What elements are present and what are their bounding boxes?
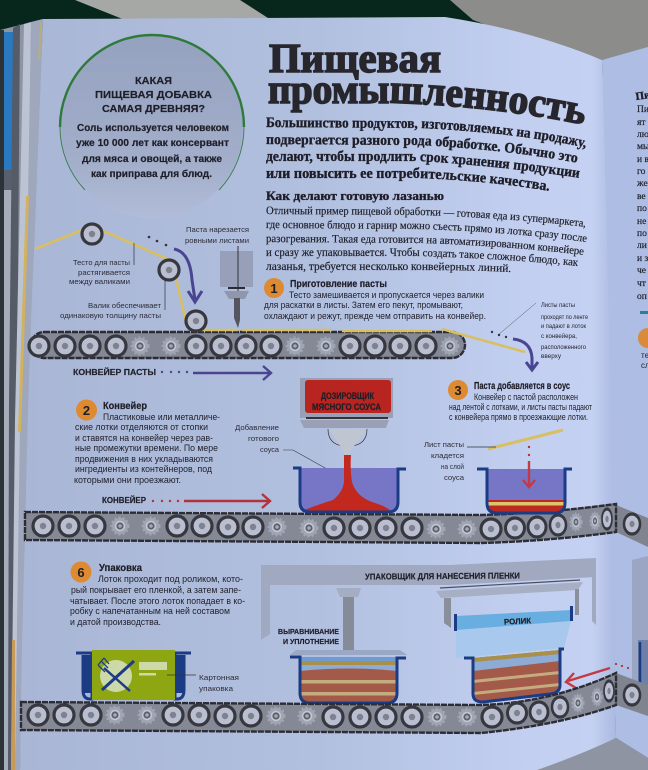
packaging machine frame [261, 558, 596, 640]
conveyor belt: trays [25, 504, 616, 543]
step 1 text: Тесто замешивается и пропускается через валики [289, 290, 484, 301]
body paragraph: разогревания. Такая еда готовится на автоматизированном конвейере [266, 235, 584, 256]
sheet label: Лист пасты [424, 440, 464, 449]
sheet label [424, 440, 465, 482]
arrow: sheets down [491, 331, 538, 370]
body paragraph: Отличный пример пищевой обработки — готовая еда из супермаркета, [266, 206, 585, 228]
step 6 text: и датой производства. [70, 617, 161, 628]
sauce label: готового [248, 434, 279, 443]
step 3 badge: 3 [454, 383, 462, 398]
step 6 text [70, 563, 245, 628]
tray with lasagne layers [290, 657, 406, 703]
press: levelling and sealing: И УПЛОТНЕНИЕ [283, 637, 339, 646]
right facing page [602, 47, 648, 758]
right facing page: по [637, 229, 647, 239]
arrow: tray moving left [566, 663, 629, 688]
sheet label: соуса [444, 473, 465, 482]
label: sheets fall into tray [498, 302, 588, 360]
arrow: pasta falling to conveyor [148, 236, 202, 302]
step 1 text: Приготовление пасты [290, 279, 387, 290]
label: sheets fall into tray: и падают в лоток [541, 323, 586, 330]
sheet label: кладется [431, 451, 464, 460]
right facing page: и з [637, 254, 648, 264]
sauce label: Добавление [235, 423, 279, 432]
callout circle: oldest food additive [60, 35, 244, 218]
right facing page: оп [637, 292, 647, 302]
right facing page: чт [637, 279, 647, 289]
right facing page: же [636, 179, 648, 189]
step 6 text: Упаковка [99, 563, 143, 574]
step 6 badge: 6 [77, 565, 85, 580]
intro paragraph: делают, чтобы продлить срок хранения продукции [266, 150, 580, 178]
subheading: lasagne: Как делают готовую лазанью [266, 188, 444, 203]
packaging machine frame: УПАКОВЩИК ДЛЯ НАНЕСЕНИЯ ПЛЕНКИ [365, 570, 520, 582]
step 3 text: Паста добавляется в соус [474, 381, 570, 392]
dispenser: meat sauce: ДОЗИРОВЩИК [321, 391, 374, 401]
step 6 text: рый покрывает его пленкой, а затем запе- [71, 585, 241, 596]
intro paragraph: подвергается разного рода обработке. Обычно это [266, 136, 578, 162]
step 2 text: ингредиенты из контейнеров, под [75, 464, 212, 475]
cardboard label: Картонная [199, 673, 239, 682]
cardboard label [199, 673, 239, 693]
tray with sauce [293, 455, 406, 512]
roller labels: растягивается [78, 268, 130, 277]
conveyor belt: pasta [29, 332, 465, 358]
title: промышленность [268, 82, 585, 124]
step 2 text: ные промежутки времени. По мере [75, 443, 218, 454]
tray with sauce and pasta [477, 469, 572, 513]
step 2 text: Пластиковые или металличе- [103, 412, 220, 423]
callout circle: oldest food additive: ПИЩЕВАЯ ДОБАВКА [95, 89, 212, 101]
roller labels: ровными листами [185, 236, 249, 245]
step 1 text [264, 279, 486, 322]
step 6 text: Лоток проходит под роликом, кото- [98, 574, 243, 585]
roller labels: Паста нарезается [186, 225, 249, 234]
right facing page: не [637, 217, 646, 227]
pasta sheet on rollers [35, 226, 525, 352]
sheet label: на слой [441, 462, 464, 471]
title [268, 35, 585, 124]
step 1 text: для раскатки в листы. Затем его пекут, промывают, [264, 300, 463, 311]
callout circle: oldest food additive: КАКАЯ [135, 75, 172, 87]
conveyor label and arrow: КОНВЕЙЕР [102, 494, 146, 505]
sheet of pasta above tray [467, 430, 563, 449]
step 2 badge: 2 [83, 403, 90, 418]
cutter [220, 246, 253, 328]
step 1 badge [264, 278, 284, 298]
step 3 text: Конвейер с пастой расположен [474, 392, 578, 403]
label: sheets fall into tray: расположенного [541, 344, 586, 351]
step 1 text: охлаждают и режут, прежде чем отправить на конвейер. [264, 311, 486, 322]
step 2 text [74, 401, 220, 486]
callout circle: oldest food additive: как приправа для блюд. [91, 168, 212, 180]
conveyor belt: packaging [21, 673, 616, 733]
body paragraph [266, 206, 587, 273]
arrow: sheet down to tray [523, 446, 535, 487]
sauce label [235, 423, 343, 478]
film roller assembly: РОЛИК [504, 616, 531, 627]
callout circle: oldest food additive: уже 10 000 лет как консервант [76, 138, 229, 149]
callout circle: oldest food additive: САМАЯ ДРЕВНЯЯ? [102, 103, 205, 115]
step 2 text: ские лотки отделяются от стопки [75, 422, 208, 433]
roller labels: одинаковую толщину пасты [60, 311, 161, 320]
title: Пищевая [269, 35, 441, 81]
cardboard label: упаковка [199, 684, 234, 693]
right facing page: го [637, 167, 646, 177]
step 3 badge [448, 380, 468, 400]
body paragraph: где основное блюдо и гарнир можно съесть прямо из лотка сразу после [266, 220, 587, 242]
label: sheets fall into tray: Листы пасты [541, 302, 575, 309]
right facing page: че [637, 266, 646, 276]
roller labels: между валиками [69, 277, 130, 286]
body paragraph: и сразу же упаковывается. Чтобы создать такое сложное блюдо, как [266, 247, 578, 266]
callout circle: oldest food additive: для мяса и овощей, а также [82, 154, 222, 165]
tray under film [464, 649, 564, 702]
callout circle: oldest food additive: Соль используется человеком [77, 123, 229, 134]
step 1 badge: 1 [270, 281, 278, 296]
step 6 text: чатывает. После этого лоток попадает в ко- [70, 596, 245, 607]
roller labels: Тесто для пасты [73, 258, 130, 267]
icon: plate, fork and knife [98, 658, 134, 692]
right facing page: ли [637, 241, 647, 251]
step 2 text: Конвейер [103, 401, 147, 412]
step 2 text: и ставятся на конвейер через рав- [75, 433, 213, 444]
rollers [82, 224, 206, 331]
step 3 text [449, 381, 592, 423]
right facing page: по [637, 204, 647, 214]
label: sheets fall into tray: с конвейера, [541, 332, 577, 340]
dispenser: meat sauce [300, 378, 393, 458]
right facing page: ят [637, 118, 646, 128]
film roller assembly [436, 580, 583, 658]
right facing page: ве [637, 192, 646, 202]
step 6 text: робку с напечатанным на ней составом [70, 606, 230, 617]
dispenser: meat sauce: МЯСНОГО СОУСА [312, 402, 381, 412]
cardboard-wrapped tray [76, 650, 196, 700]
body paragraph: лазанья, требуется несколько конвейерных линий. [266, 261, 510, 273]
intro paragraph [266, 117, 586, 191]
step 2 badge [76, 400, 97, 420]
press: levelling and sealing [278, 588, 407, 655]
step 6 badge [70, 562, 92, 582]
pasta conveyor label and arrow: КОНВЕЙЕР ПАСТЫ [73, 366, 156, 377]
roller labels [60, 225, 249, 320]
intro paragraph: или повысить ее потребительские качества. [266, 167, 549, 191]
intro paragraph: Большинство продуктов, изготовляемых на продажу, [266, 117, 586, 150]
label: sheets fall into tray: вверху [541, 353, 562, 360]
sauce label: соуса [260, 445, 280, 454]
conveyor label and arrow [102, 494, 270, 508]
pasta conveyor label and arrow [73, 366, 271, 380]
label: sheets fall into tray: проходят по ленте [541, 314, 588, 321]
step 3 text: с конвейера прямо в проезжающие лотки. [449, 412, 588, 423]
step 2 text: продвижения в них укладываются [75, 454, 213, 465]
roller labels: Валик обеспечивает [88, 301, 162, 310]
step 2 text: которыми они проезжают. [74, 475, 181, 486]
press: levelling and sealing: ВЫРАВНИВАНИЕ [278, 627, 339, 636]
step 3 text: над лентой с лотками, и листы пасты падают [449, 402, 592, 413]
